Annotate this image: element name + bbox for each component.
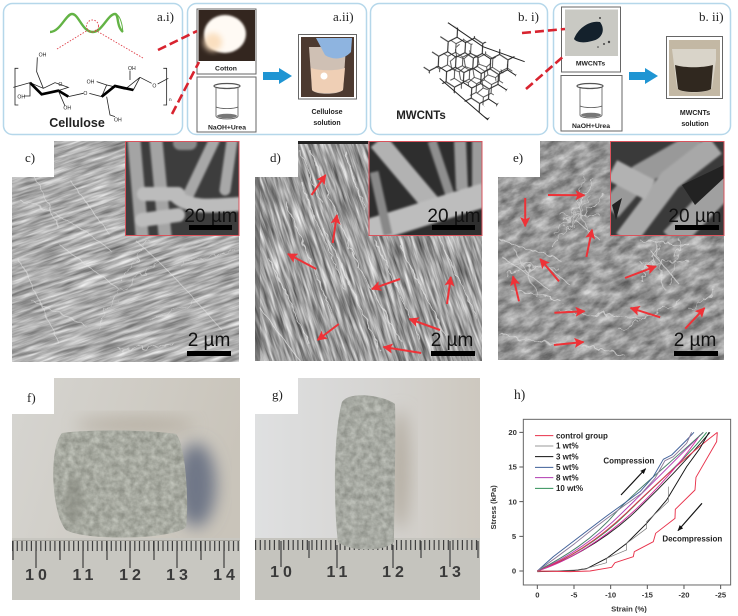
heading: Cellulose: Cellulose	[49, 116, 105, 130]
axis tick labels: -5	[571, 590, 578, 599]
label e	[498, 141, 540, 177]
panel b.i: MWCNTs	[370, 4, 548, 134]
molecule atom labels: OH	[63, 105, 71, 111]
ruler: 11	[327, 564, 351, 581]
foam block	[334, 395, 396, 550]
chart h: stress-strain curves	[489, 419, 731, 613]
legend: control group	[556, 431, 608, 440]
axis tick labels: -25	[715, 590, 727, 599]
molecule atom labels: O	[152, 84, 156, 90]
axis tick labels: 20	[508, 428, 517, 437]
axis tick labels: -10	[605, 590, 616, 599]
ruler: 10	[25, 567, 51, 584]
label b.ii: b. ii)	[699, 9, 724, 24]
nanotube clusters	[500, 175, 715, 355]
scale bars: 20 µm	[668, 206, 722, 227]
ruler: 10	[270, 564, 296, 581]
panel c: SEM image	[12, 141, 240, 362]
molecule atom labels: OH	[39, 53, 47, 59]
inset: fibers	[125, 141, 240, 235]
label b.i: b. i)	[518, 9, 539, 24]
heading: MWCNTs: MWCNTs	[396, 110, 446, 122]
annotation: decompression	[662, 503, 722, 544]
panel a.i: cellulose structure	[4, 4, 182, 134]
legend: 8 wt%	[556, 473, 579, 482]
photo: cellulose solution	[298, 34, 356, 127]
ruler: 13	[439, 564, 465, 581]
molecule atom labels: OH	[87, 79, 95, 85]
molecule atom labels: OH	[17, 94, 25, 100]
red arrows	[513, 195, 704, 345]
molecule atom labels: O	[58, 82, 62, 88]
box: NaOH + Urea beaker	[561, 76, 622, 131]
axis tick labels: -15	[642, 590, 654, 599]
ruler: 13	[166, 567, 192, 584]
photo: cotton	[197, 9, 256, 74]
axis tick labels: 5	[512, 532, 517, 541]
scale bars	[668, 206, 722, 356]
scale bars: 2 µm	[674, 330, 716, 351]
molecule atom labels: O	[83, 91, 87, 97]
axis tick labels: 15	[508, 463, 518, 472]
label c	[12, 141, 54, 177]
molecule atom labels: OH	[128, 66, 136, 72]
axis tick labels	[508, 428, 727, 599]
red dashed connector lines	[158, 29, 565, 114]
caption	[311, 109, 343, 127]
panel a.ii: cellulose solution	[188, 4, 366, 134]
legend: 10 wt%	[556, 484, 583, 493]
scale bars: 2 µm	[188, 330, 230, 351]
scale bars: 2 µm	[431, 330, 473, 351]
scale bars	[184, 206, 238, 356]
panel e: SEM image: e)	[513, 150, 523, 165]
photo: MWCNTs solution	[666, 36, 722, 128]
axis tick labels: 0	[535, 590, 539, 599]
ruler	[12, 538, 240, 600]
icon: nanotube	[423, 23, 525, 120]
axis tick labels: 0	[512, 567, 516, 576]
arrow	[629, 68, 658, 84]
axis titles: Strain (%)	[611, 604, 647, 613]
photo: cotton: Cotton	[215, 66, 237, 72]
icon: green helix	[50, 14, 123, 32]
plot frame	[523, 419, 731, 585]
foam block	[50, 428, 190, 542]
ruler: 12	[119, 567, 145, 584]
legend: 5 wt%	[556, 463, 579, 472]
label a.i: a.i)	[157, 9, 174, 24]
molecule atom labels: OH	[114, 118, 122, 124]
label f	[12, 378, 54, 414]
axis tick labels: -20	[678, 590, 690, 599]
panel b.ii: MWCNTs solution	[554, 4, 730, 134]
shadow	[176, 443, 216, 527]
red arrows	[288, 175, 451, 353]
scale bars	[427, 206, 481, 356]
caption	[680, 110, 710, 128]
surface wrinkles	[262, 150, 478, 361]
photo: MWCNTs powder: MWCNTs	[576, 60, 605, 68]
panel g: sample photo with ruler: g)	[272, 387, 283, 402]
caption: solution	[681, 121, 709, 128]
panel c: SEM image: c)	[25, 150, 35, 165]
scale bars: 20 µm	[184, 206, 238, 227]
legend: 1 wt%	[556, 442, 579, 451]
label g	[255, 378, 298, 414]
panel d: SEM image	[255, 141, 482, 361]
annotation: compression	[603, 456, 654, 495]
legend	[535, 431, 608, 493]
caption: Cellulose	[311, 109, 343, 116]
annotation: decompression: Decompression	[662, 535, 722, 544]
inset: fibers	[611, 142, 724, 235]
axis ticks	[519, 432, 721, 589]
panel f: sample photo with ruler: f)	[27, 390, 36, 405]
scale bars: 20 µm	[427, 206, 481, 227]
box: NaOH + Urea beaker: NaOH+Urea	[572, 123, 610, 130]
surface wrinkles	[20, 165, 235, 350]
inset: fibers	[365, 141, 485, 235]
ruler: 11	[73, 567, 97, 584]
molecule atom labels	[17, 53, 172, 124]
axis tick labels: 10	[508, 497, 517, 506]
label d	[255, 141, 298, 177]
cellulose molecule	[13, 53, 172, 124]
annotation: compression: Compression	[603, 456, 654, 465]
caption: solution	[313, 120, 341, 127]
label a.ii: a.ii)	[333, 9, 354, 24]
panel f: sample photo with ruler	[12, 378, 240, 600]
curves	[537, 432, 717, 572]
panel e: SEM image	[498, 141, 724, 360]
caption: MWCNTs	[680, 110, 710, 117]
arrow	[263, 68, 292, 84]
panel d: SEM image: d)	[270, 150, 281, 165]
chart h: stress-strain curves: Stress (kPa)	[489, 485, 498, 529]
box: NaOH + Urea beaker: NaOH+Urea	[208, 124, 246, 132]
ruler: 14	[213, 567, 239, 584]
molecule atom labels: n	[169, 97, 172, 102]
ruler	[255, 538, 480, 600]
dotted zoom lines	[57, 20, 143, 58]
legend: 3 wt%	[556, 452, 579, 461]
panel g: sample photo with ruler	[255, 378, 480, 600]
ruler: 12	[382, 564, 408, 581]
box: NaOH + Urea beaker	[197, 77, 256, 132]
label h: h)	[514, 387, 525, 402]
photo: MWCNTs powder	[562, 7, 620, 72]
